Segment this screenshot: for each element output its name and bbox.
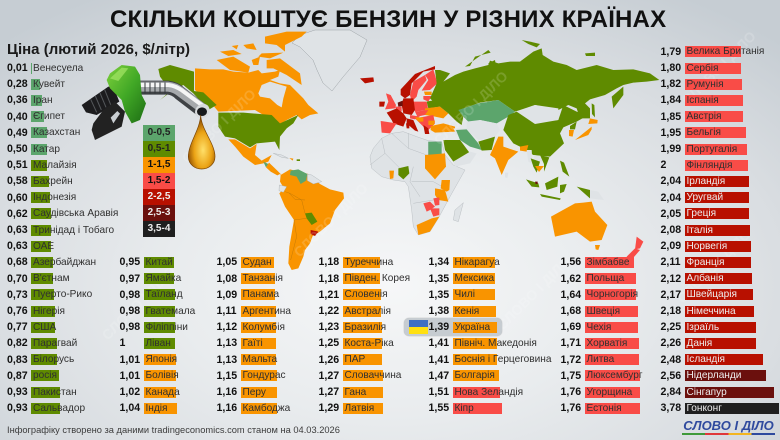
column 3: 1,05-1,16: Танзанія bbox=[242, 273, 283, 284]
legend: 0,5-1 bbox=[143, 141, 175, 157]
watermarks: СЛОВО І ДІЛО bbox=[99, 263, 179, 343]
column 2: 0,95-1,04 bbox=[120, 256, 196, 414]
watermarks: СЛОВО І ДІЛО bbox=[679, 28, 759, 108]
column 7: 1,79-3,78: Австрія bbox=[686, 111, 721, 122]
nozzle body bbox=[107, 65, 146, 123]
column 1: 0,01-0,93: В'єтнам bbox=[33, 273, 70, 284]
column 1: 0,01-0,93: Венесуела bbox=[33, 63, 83, 74]
column 1: 0,01-0,93: Тринідад і Тобаго bbox=[33, 225, 114, 236]
column 7: 1,79-3,78: Албанія bbox=[686, 273, 724, 284]
column 7: 1,79-3,78: 3,78 bbox=[660, 402, 681, 414]
column 5: 1,34-1,55: 1,35 bbox=[428, 273, 449, 285]
column 7: 1,79-3,78: Уругвай bbox=[686, 192, 723, 203]
oil drop bbox=[188, 115, 215, 169]
column 6: 1,56-1,76: Хорватія bbox=[586, 338, 627, 349]
column 7: 1,79-3,78: Ірландія bbox=[686, 176, 725, 187]
column 1: 0,01-0,93: Малайзія bbox=[33, 160, 77, 171]
column 7: 1,79-3,78: 1,95 bbox=[660, 127, 681, 139]
column 4: 1,18-1,29: 1,18 bbox=[318, 273, 339, 285]
legend: 2-2,5: 2-2,5 bbox=[148, 191, 170, 202]
column 7: 1,79-3,78: 2,26 bbox=[660, 337, 681, 349]
column 1: 0,01-0,93: 0,28 bbox=[7, 78, 28, 90]
column 1: 0,01-0,93: Бахрейн bbox=[33, 176, 73, 187]
column 1: 0,01-0,93 bbox=[7, 62, 118, 414]
legend: 0,5-1: 0,5-1 bbox=[148, 143, 170, 154]
column 5: 1,34-1,55: 1,35 bbox=[428, 289, 449, 301]
column 7: 1,79-3,78: Німеччина bbox=[686, 306, 736, 317]
legend: 2-2,5 bbox=[143, 189, 175, 205]
column 2: 0,95-1,04: 0,98 bbox=[120, 321, 140, 333]
column 5: 1,34-1,55: Нова Зеландія bbox=[454, 387, 523, 398]
column 6: 1,56-1,76: 1,76 bbox=[560, 402, 581, 414]
column 3: 1,05-1,16: 1,15 bbox=[216, 370, 237, 382]
column 2: 0,95-1,04: 1,01 bbox=[120, 370, 140, 382]
column 7: 1,79-3,78: 1,84 bbox=[660, 94, 681, 106]
column 1: 0,01-0,93: 0,58 bbox=[7, 175, 28, 187]
column 4: 1,18-1,29 bbox=[318, 256, 410, 414]
column 1: 0,01-0,93: Єгипет bbox=[33, 111, 65, 122]
column 2: 0,95-1,04: Болівія bbox=[146, 370, 179, 381]
column 2: 0,95-1,04: 0,98 bbox=[120, 289, 140, 301]
column 7: 1,79-3,78: Іспанія bbox=[686, 95, 719, 106]
column 4: 1,18-1,29: Латвія bbox=[344, 403, 374, 414]
column 7: 1,79-3,78: Данія bbox=[686, 338, 712, 349]
column 7: 1,79-3,78: Бельгія bbox=[686, 127, 721, 138]
column 3: 1,05-1,16: Судан bbox=[242, 257, 272, 268]
column 6: 1,56-1,76: 1,68 bbox=[560, 305, 581, 317]
column 2: 0,95-1,04: Таїланд bbox=[146, 289, 183, 300]
column 5: 1,34-1,55: 1,47 bbox=[428, 370, 449, 382]
column 2: 0,95-1,04: 1,01 bbox=[120, 354, 140, 366]
column 3: 1,05-1,16: Панама bbox=[242, 289, 279, 300]
column 1: 0,01-0,93: Нігерія bbox=[33, 306, 65, 317]
column 4: 1,18-1,29: Гана bbox=[344, 387, 366, 398]
footer source note: Інфографіку створено за даними tradingeconomics.com станом на 04.03.2026 bbox=[7, 425, 340, 435]
column 7: 1,79-3,78: 1,82 bbox=[660, 78, 681, 90]
column 5: 1,34-1,55: Болгарія bbox=[454, 370, 495, 381]
column 5: 1,34-1,55: 1,38 bbox=[428, 305, 449, 317]
column 5: 1,34-1,55: 1,34 bbox=[428, 256, 449, 268]
column 3: 1,05-1,16: Колумбія bbox=[242, 322, 285, 333]
column 2: 0,95-1,04: 1,02 bbox=[120, 386, 140, 398]
legend: 0-0,5: 0-0,5 bbox=[148, 127, 170, 138]
column 1: 0,01-0,93: 0,62 bbox=[7, 208, 28, 220]
column 1: 0,01-0,93: 0,76 bbox=[7, 305, 28, 317]
title: СКІЛЬКИ КОШТУЄ БЕНЗИН У РІЗНИХ КРАЇНАХ bbox=[110, 6, 666, 33]
column 4: 1,18-1,29: 1,26 bbox=[318, 354, 339, 366]
column 3: 1,05-1,16: 1,16 bbox=[216, 402, 237, 414]
column 4: 1,18-1,29: Коста-Ріка bbox=[344, 338, 394, 349]
legend: 3,5-4: 3,5-4 bbox=[148, 223, 170, 234]
column 6: 1,56-1,76: Чехія bbox=[586, 322, 611, 333]
column 7: 1,79-3,78: 2,48 bbox=[660, 354, 681, 366]
column 3: 1,05-1,16: 1,11 bbox=[216, 305, 237, 317]
column 7: 1,79-3,78: 2 bbox=[660, 159, 666, 171]
map: Europe bbox=[360, 66, 455, 134]
column 1: 0,01-0,93: 0,63 bbox=[7, 224, 28, 236]
column 7: 1,79-3,78: 1,79 bbox=[660, 46, 681, 58]
logo: СЛОВО І ДІЛО bbox=[683, 418, 774, 433]
column 5: 1,34-1,55: 1,39 bbox=[428, 321, 449, 333]
nozzle handle bbox=[82, 87, 125, 140]
column 1: 0,01-0,93: 0,63 bbox=[7, 240, 28, 252]
column 7: 1,79-3,78: 2,09 bbox=[660, 240, 681, 252]
column 1: 0,01-0,93: Білорусь bbox=[33, 354, 74, 365]
column 4: 1,18-1,29: Словаччина bbox=[344, 370, 401, 381]
column 7: 1,79-3,78: 2,56 bbox=[660, 370, 681, 382]
column 4: 1,18-1,29: Австралія bbox=[344, 306, 391, 317]
column 7: 1,79-3,78: 2,18 bbox=[660, 305, 681, 317]
column 5: 1,34-1,55: 1,51 bbox=[428, 386, 449, 398]
column 1: 0,01-0,93: Казахстан bbox=[33, 127, 80, 138]
column 7: 1,79-3,78: Греція bbox=[686, 208, 716, 219]
column 2: 0,95-1,04: 1,04 bbox=[120, 402, 140, 414]
column 7: 1,79-3,78: 2,08 bbox=[660, 224, 681, 236]
column 7: 1,79-3,78: 2,25 bbox=[660, 321, 681, 333]
column 7: 1,79-3,78: Сербія bbox=[686, 63, 719, 74]
subtitle: price heading: Ціна (лютий 2026, $/літр) bbox=[7, 41, 190, 58]
column 3: 1,05-1,16: 1,16 bbox=[216, 386, 237, 398]
column 7: 1,79-3,78: 2,04 bbox=[660, 175, 681, 187]
column 6: 1,56-1,76: Польща bbox=[586, 273, 624, 284]
column 1: 0,01-0,93: Саудівська Аравія bbox=[33, 208, 118, 219]
column 1: 0,01-0,93: 0,70 bbox=[7, 273, 28, 285]
column 6: 1,56-1,76: Зімбабве bbox=[586, 257, 629, 268]
column 3: 1,05-1,16 bbox=[216, 256, 291, 414]
icon: fuel pump nozzle with drop bbox=[82, 65, 216, 170]
column 6: 1,56-1,76: 1,72 bbox=[560, 354, 581, 366]
column 5: 1,34-1,55: Кіпр bbox=[454, 403, 474, 414]
map: Canada bbox=[195, 32, 318, 124]
column 1: 0,01-0,93: 0,40 bbox=[7, 111, 28, 123]
map: South America bbox=[270, 165, 344, 270]
column 2: 0,95-1,04: Японія bbox=[146, 354, 177, 365]
column 1: 0,01-0,93: ОАЕ bbox=[33, 241, 54, 252]
column 1: 0,01-0,93: 0,68 bbox=[7, 256, 28, 268]
column 1: 0,01-0,93: 0,73 bbox=[7, 289, 28, 301]
watermarks: СЛОВО І ДІЛО bbox=[179, 86, 259, 166]
legend bbox=[143, 125, 175, 237]
column 1: 0,01-0,93: 0,51 bbox=[7, 159, 28, 171]
column 7: 1,79-3,78: 2,11 bbox=[660, 256, 681, 268]
column 7: 1,79-3,78: 1,85 bbox=[660, 111, 681, 123]
column 4: 1,18-1,29: Словенія bbox=[344, 289, 388, 300]
column 6: 1,56-1,76: 1,76 bbox=[560, 386, 581, 398]
map: USA, Mexico and Central America bbox=[218, 113, 300, 175]
column 1: 0,01-0,93: Пуерто-Рико bbox=[33, 289, 92, 300]
column 4: 1,18-1,29: 1,27 bbox=[318, 386, 339, 398]
column 2: 0,95-1,04: 0,98 bbox=[120, 305, 140, 317]
column 3: 1,05-1,16: Гондурас bbox=[242, 370, 286, 381]
column 7: 1,79-3,78: Сінгапур bbox=[686, 387, 727, 398]
column 5: 1,34-1,55: Боснія і Герцеговина bbox=[454, 354, 551, 365]
column 2: 0,95-1,04: Індія bbox=[146, 403, 167, 414]
column 4: 1,18-1,29: Бразилія bbox=[344, 322, 386, 333]
legend: 2,5-3 bbox=[143, 205, 175, 221]
column 7: 1,79-3,78: Португалія bbox=[686, 144, 737, 155]
column 1: 0,01-0,93: 0,60 bbox=[7, 192, 28, 204]
column 2: 0,95-1,04: Філіппіни bbox=[146, 322, 188, 333]
column 1: 0,01-0,93: 0,93 bbox=[7, 386, 28, 398]
column 7: 1,79-3,78: 1,99 bbox=[660, 143, 681, 155]
column 1: 0,01-0,93: 0,93 bbox=[7, 402, 28, 414]
column 4: 1,18-1,29: 1,25 bbox=[318, 337, 339, 349]
column 3: 1,05-1,16: Гаїті bbox=[242, 338, 263, 349]
legend: 1-1,5: 1-1,5 bbox=[148, 159, 170, 170]
legend: 1,5-2: 1,5-2 bbox=[148, 175, 170, 186]
column 2: 0,95-1,04: Гватемала bbox=[146, 306, 195, 317]
column 7: 1,79-3,78: 2,17 bbox=[660, 289, 681, 301]
column 4: 1,18-1,29: 1,27 bbox=[318, 370, 339, 382]
column 3: 1,05-1,16: 1,05 bbox=[216, 256, 237, 268]
column 3: 1,05-1,16: Камбоджа bbox=[242, 403, 290, 414]
column 6: 1,56-1,76: Швеція bbox=[586, 306, 620, 317]
column 5: 1,34-1,55: Північ. Македонія bbox=[454, 338, 537, 349]
column 1: 0,01-0,93: Кувейт bbox=[33, 79, 65, 90]
column 6: 1,56-1,76: Естонія bbox=[586, 403, 622, 414]
column 4: 1,18-1,29: Півден. Корея bbox=[344, 273, 410, 284]
watermarks: СЛОВО І ДІЛО bbox=[674, 226, 754, 306]
column 5: 1,34-1,55: 1,55 bbox=[428, 402, 449, 414]
column 2: 0,95-1,04: Ліван bbox=[146, 338, 171, 349]
column 7: 1,79-3,78: Ісландія bbox=[686, 354, 725, 365]
column 6: 1,56-1,76: 1,56 bbox=[560, 256, 581, 268]
column 6: 1,56-1,76 bbox=[560, 256, 642, 414]
column 1: 0,01-0,93: Парагвай bbox=[33, 338, 77, 349]
column 5: 1,34-1,55 bbox=[428, 256, 552, 414]
map: Greenland bbox=[292, 30, 367, 91]
column 2: 0,95-1,04: Ямайка bbox=[146, 273, 181, 284]
column 4: 1,18-1,29: ПАР bbox=[344, 354, 365, 365]
column 5: 1,34-1,55: Нікарагуа bbox=[454, 257, 500, 268]
map: Alaska bbox=[158, 65, 217, 110]
column 5: 1,34-1,55: 1,41 bbox=[428, 337, 449, 349]
column 7: 1,79-3,78: Гонконг bbox=[686, 403, 722, 414]
column 7: 1,79-3,78: Ізраїль bbox=[686, 322, 719, 333]
legend: 1,5-2 bbox=[143, 173, 175, 189]
column 6: 1,56-1,76: 1,69 bbox=[560, 321, 581, 333]
column 7: 1,79-3,78: 2,04 bbox=[660, 192, 681, 204]
column 3: 1,05-1,16: Аргентина bbox=[242, 306, 291, 317]
column 6: 1,56-1,76: 1,71 bbox=[560, 337, 581, 349]
column 4: 1,18-1,29: 1,22 bbox=[318, 305, 339, 317]
column 5: 1,34-1,55: Україна bbox=[454, 322, 490, 333]
column 1: 0,01-0,93: Азербайджан bbox=[33, 257, 96, 268]
column 2: 0,95-1,04: Китай bbox=[146, 257, 173, 268]
column 7: 1,79-3,78: Румунія bbox=[686, 79, 724, 90]
column 1: 0,01-0,93: Іран bbox=[33, 95, 53, 106]
watermarks: СЛОВО І ДІЛО bbox=[291, 180, 371, 260]
column 7: 1,79-3,78: Нідерланди bbox=[686, 370, 741, 381]
column 4: 1,18-1,29: 1,29 bbox=[318, 402, 339, 414]
legend: 0-0,5 bbox=[143, 125, 175, 141]
column 6: 1,56-1,76: 1,75 bbox=[560, 370, 581, 382]
legend: 2,5-3: 2,5-3 bbox=[148, 207, 170, 218]
column 4: 1,18-1,29: Туреччина bbox=[344, 257, 393, 268]
column 1: 0,01-0,93: 0,82 bbox=[7, 337, 28, 349]
column 5: 1,34-1,55: Мексика bbox=[454, 273, 494, 284]
column 3: 1,05-1,16: Перу bbox=[242, 387, 266, 398]
column 3: 1,05-1,16: 1,13 bbox=[216, 337, 237, 349]
column 7: 1,79-3,78: Норвегія bbox=[686, 241, 727, 252]
column 7: 1,79-3,78: 1,80 bbox=[660, 62, 681, 74]
column 7: 1,79-3,78: Італія bbox=[686, 225, 713, 236]
column 6: 1,56-1,76: Угорщина bbox=[586, 387, 632, 398]
column 5: 1,34-1,55: Кенія bbox=[454, 306, 479, 317]
column 7: 1,79-3,78: Швейцарія bbox=[686, 289, 737, 300]
column 6: 1,56-1,76: Чорногорія bbox=[586, 289, 638, 300]
column 7: 1,79-3,78: 2,05 bbox=[660, 208, 681, 220]
column 7: 1,79-3,78: Франція bbox=[686, 257, 724, 268]
column 5: 1,34-1,55: 1,41 bbox=[428, 354, 449, 366]
column 4: 1,18-1,29: 1,18 bbox=[318, 256, 339, 268]
column 6: 1,56-1,76: Люксембург bbox=[586, 370, 642, 381]
column 7: 1,79-3,78: Велика Британія bbox=[686, 46, 764, 57]
column 1: 0,01-0,93: 0,01 bbox=[7, 62, 28, 74]
icon: ukraine flag bbox=[409, 320, 428, 334]
column 4: 1,18-1,29: 1,21 bbox=[318, 289, 339, 301]
column 1: 0,01-0,93: 0,83 bbox=[7, 354, 28, 366]
column 2: 0,95-1,04: 1 bbox=[120, 337, 125, 349]
column 3: 1,05-1,16: 1,09 bbox=[216, 289, 237, 301]
column 1: 0,01-0,93: Індонезія bbox=[33, 192, 76, 203]
column 7: 1,79-3,78: 2,12 bbox=[660, 273, 681, 285]
column 1: 0,01-0,93: 0,87 bbox=[7, 370, 28, 382]
watermarks: СЛОВО І ДІЛО bbox=[431, 68, 511, 148]
watermarks: СЛОВО І ДІЛО bbox=[494, 253, 574, 333]
column 3: 1,05-1,16: 1,13 bbox=[216, 354, 237, 366]
column 6: 1,56-1,76: Литва bbox=[586, 354, 614, 365]
column 1: 0,01-0,93: росія bbox=[33, 370, 57, 381]
column 5: 1,34-1,55: Чилі bbox=[454, 289, 475, 300]
column 2: 0,95-1,04: Канада bbox=[146, 387, 180, 398]
legend: 1-1,5 bbox=[143, 157, 175, 173]
column 3: 1,05-1,16: Мальта bbox=[242, 354, 277, 365]
column 3: 1,05-1,16: 1,08 bbox=[216, 273, 237, 285]
column 4: 1,18-1,29: 1,23 bbox=[318, 321, 339, 333]
column 1: 0,01-0,93: Сальвадор bbox=[33, 403, 85, 414]
column 1: 0,01-0,93: 0,36 bbox=[7, 94, 28, 106]
column 1: 0,01-0,93: 0,50 bbox=[7, 143, 28, 155]
column 1: 0,01-0,93: 0,49 bbox=[7, 127, 28, 139]
nozzle spout bbox=[140, 82, 212, 121]
column 3: 1,05-1,16: 1,12 bbox=[216, 321, 237, 333]
column 7: 1,79-3,78 bbox=[660, 46, 779, 414]
column 2: 0,95-1,04: 0,95 bbox=[120, 256, 140, 268]
column 6: 1,56-1,76: 1,62 bbox=[560, 273, 581, 285]
map: Asia and Oceania bbox=[430, 40, 659, 262]
map: Africa bbox=[370, 132, 465, 235]
column 1: 0,01-0,93: Пакистан bbox=[33, 387, 77, 398]
ukraine highlight bbox=[404, 318, 502, 336]
column 7: 1,79-3,78: Фінляндія bbox=[686, 160, 733, 171]
legend: 3,5-4 bbox=[143, 221, 175, 237]
column 6: 1,56-1,76: 1,64 bbox=[560, 289, 581, 301]
column 7: 1,79-3,78: 2,84 bbox=[660, 386, 681, 398]
column 2: 0,95-1,04: 0,97 bbox=[120, 273, 140, 285]
column 1: 0,01-0,93: 0,77 bbox=[7, 321, 28, 333]
column 1: 0,01-0,93: Катар bbox=[33, 144, 60, 155]
column 1: 0,01-0,93: США bbox=[33, 322, 56, 333]
